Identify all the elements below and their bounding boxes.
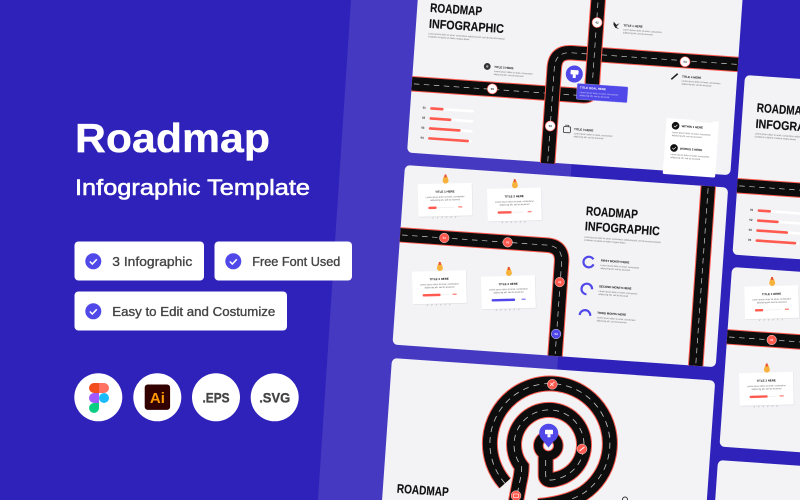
item: title 1: adipiscing elit, sed do eiusmod [623, 31, 654, 36]
milestones on road: 04 [554, 332, 558, 336]
slide 1 title: ROADMAP [430, 1, 483, 18]
right slide title [755, 101, 800, 136]
spiral road [490, 384, 610, 500]
right note card 3: TITLE 3 HERE [757, 378, 776, 383]
goal card: Lorem ipsum dolor sit amet, consectetur [580, 91, 619, 97]
right slide progress bars [748, 208, 800, 245]
month 1 [583, 256, 640, 273]
icon: EPS format: .EPS [202, 389, 230, 405]
intro text [584, 236, 661, 247]
right slide progress bars: 02 [749, 218, 753, 222]
right slide intro text: incididunt ut labore et dolore magna aliqua [755, 135, 797, 141]
item: title 3: TITLE 3 HERE [574, 127, 594, 133]
month 2: SECOND MONTH HERE [599, 284, 632, 291]
slide 3 title: ROADMAP [396, 482, 449, 499]
item: title 5: adipiscing elit, sed do eiusmod [494, 73, 524, 78]
road: left curve [392, 235, 563, 356]
progress bars: 03 [421, 125, 425, 130]
subtitle: Infographic Template [75, 175, 310, 200]
note card 2 [487, 178, 542, 223]
title: ROADMAP [586, 204, 638, 222]
main title: Roadmap [75, 115, 270, 161]
milestone 03 [545, 121, 556, 131]
item: title 3: adipiscing elit, sed do eiusmod [573, 135, 604, 140]
milestones on road: 03 [558, 280, 562, 284]
checklist card: WORKS 2 HERE [680, 147, 702, 152]
progress bars: 01 [423, 106, 426, 110]
progress bars [420, 106, 474, 143]
feature badge: Free Font Used: Free Font Used [252, 254, 340, 269]
panel: slide 2 copy at right [719, 267, 800, 469]
milestone 06 [487, 84, 498, 94]
road: curve to the right [548, 52, 738, 176]
item: title 3 [563, 125, 613, 141]
item: title 4: TITLE 4 HERE [682, 75, 701, 80]
note card 3: adipiscing elit, sed do eiusmod [424, 286, 455, 289]
checklist card: adipiscing elit, sed do eiusmod [670, 156, 701, 161]
lighter diagonal band [318, 0, 583, 500]
item: title 3: Lorem ipsum dolor sit amet, consectetur [574, 132, 613, 138]
slide 1 title [429, 1, 506, 36]
icon: Figma [74, 373, 122, 421]
right note card 3: Lorem ipsum dolor sit amet, consectetur [747, 384, 786, 388]
month 1: Lorem ipsum dolor sit amet, consectetur [600, 264, 640, 270]
icon: SVG format [251, 373, 299, 421]
note card 3 [412, 261, 467, 306]
month 1: FIRST MONTH HERE [601, 258, 630, 264]
milestones on road: 01 [443, 236, 446, 240]
goal card: adipiscing elit, sed do eiusmod [579, 94, 610, 99]
right road milestone: 01 [770, 338, 774, 342]
right slide progress bars: 04 [748, 238, 752, 242]
slide 1 intro text: Lorem ipsum dolor sit amet, consectetur adipiscing elit, sed do eiusmod tempor [428, 32, 505, 41]
feature badge: Free Font Used [214, 242, 352, 280]
right slide progress bars: 03 [749, 228, 752, 232]
checklist card: adipiscing elit, sed do eiusmod [672, 134, 702, 139]
month 3: THIRD MONTH HERE [597, 311, 626, 317]
item: title 4 [671, 73, 721, 88]
icon: SVG format: .SVG [259, 389, 290, 405]
intro text: Lorem ipsum dolor sit amet, consectetur adipiscing elit, sed do eiusmod tempor [584, 236, 661, 244]
milestone 02 [592, 17, 602, 28]
goal pin [539, 424, 558, 448]
spiral milestones [511, 379, 587, 500]
right note card 1: adipiscing elit, sed do eiusmod [757, 301, 787, 304]
slide 1 intro text [428, 32, 505, 44]
right note card 3: adipiscing elit, sed do eiusmod [751, 387, 782, 391]
milestone 04: 04 [683, 60, 687, 64]
milestones on road [433, 233, 567, 339]
right road [727, 337, 800, 359]
item: title 1: TITLE 1 HERE [623, 23, 643, 29]
slide 1 intro text: incididunt ut labore et dolore magna aliqua [428, 35, 470, 41]
item: title 4: adipiscing elit, sed do eiusmod [681, 83, 712, 88]
icon: Adobe Illustrator: Ai [150, 390, 165, 407]
feature badge: 3 Infographic: 3 Infographic [112, 254, 193, 269]
month 2: Lorem ipsum dolor sit amet, consectetur [599, 290, 638, 296]
right note card 1: Lorem ipsum dolor sit amet, consectetur [752, 297, 791, 301]
note card 4: Lorem ipsum dolor sit amet, consectetur [489, 287, 528, 291]
item: title 5 [483, 63, 534, 79]
note card 2: Lorem ipsum dolor sit amet, consectetur [495, 200, 534, 204]
milestones on road: 02 [506, 240, 510, 244]
right road milestone [767, 335, 777, 345]
road: right vertical [696, 186, 708, 366]
item: title 5: Lorem ipsum dolor sit amet, consectetur [494, 70, 533, 76]
month 2 [581, 283, 638, 299]
feature badge: Easy to Edit and Costumize [74, 292, 287, 330]
milestone 02: 02 [595, 20, 599, 25]
road: left branch [412, 63, 593, 96]
checklist card: Lorem ipsum dolor sit amet, consectetur [672, 131, 711, 137]
progress bars: 04 [420, 135, 424, 140]
slide 1 title: INFOGRAPHIC [429, 17, 504, 36]
feature badge: 3 Infographic [74, 242, 204, 280]
title [584, 204, 661, 238]
right note card 3 [739, 362, 794, 408]
note card 2: adipiscing elit, sed do eiusmod [499, 203, 530, 207]
right slide intro text [755, 132, 800, 144]
milestone 06: 06 [491, 87, 494, 91]
item: title 1: Lorem ipsum dolor sit amet, consectetur [623, 28, 662, 34]
note card 1: Lorem ipsum dolor sit amet, consectetur [426, 195, 465, 199]
note card 4 [481, 266, 536, 311]
intro text: incididunt ut labore et dolore magna aliqua [584, 239, 626, 245]
right note card 1: TITLE 1 HERE [762, 292, 781, 296]
small location icon [622, 497, 628, 500]
note card 4: TITLE 4 HERE [499, 282, 518, 286]
checklist card: WITHIN 1 HERE [681, 124, 703, 130]
note card 2: TITLE 2 HERE [505, 194, 524, 199]
road: vertical [592, 0, 600, 85]
note card 3: TITLE 3 HERE [430, 277, 449, 281]
note card 1: adipiscing elit, sed do eiusmod [430, 198, 461, 202]
icon: EPS format [192, 373, 240, 421]
item: title 4: Lorem ipsum dolor sit amet, consectetur [682, 80, 721, 85]
right note card 1 [744, 276, 800, 321]
right slide progress bars: 01 [750, 208, 754, 212]
item: title 5: TITLE 5 HERE [494, 65, 514, 70]
milestone 04 [680, 56, 690, 67]
month 2: adipiscing elit, sed do eiusmod [598, 293, 629, 298]
panel: bottom right slide [705, 460, 800, 500]
goal card: TITLE GOAL HERE [580, 85, 606, 91]
panel: slide 1 road intersections [407, 0, 743, 179]
feature badge: Easy to Edit and Costumize: Easy to Edit and Costumize [112, 304, 275, 319]
progress bars: 02 [422, 116, 426, 120]
panel: slide 2 roads and notes [392, 165, 728, 367]
checklist card: Lorem ipsum dolor sit amet, consectetur [670, 153, 710, 159]
milestone 03: 03 [549, 124, 552, 128]
panel: slide 1 copy at right [732, 75, 800, 277]
note card 1 [417, 173, 473, 219]
checklist card [663, 118, 719, 178]
month 3 [579, 310, 636, 325]
month 1: adipiscing elit, sed do eiusmod [600, 267, 631, 272]
item: title 1 [613, 22, 663, 37]
title: INFOGRAPHIC [584, 219, 660, 238]
note card 4: adipiscing elit, sed do eiusmod [493, 291, 524, 294]
right slide road [737, 186, 800, 208]
goal card [576, 83, 628, 103]
goal marker [565, 65, 583, 83]
month 3: Lorem ipsum dolor sit amet, consectetur [597, 316, 636, 322]
icon: Adobe Illustrator [133, 373, 181, 421]
panel: slide 3 spiral [379, 358, 715, 500]
note card 1: TITLE 1 HERE [435, 189, 455, 194]
note card 3: Lorem ipsum dolor sit amet, consectetur [420, 282, 459, 286]
month 3: adipiscing elit, sed do eiusmod [596, 319, 627, 324]
